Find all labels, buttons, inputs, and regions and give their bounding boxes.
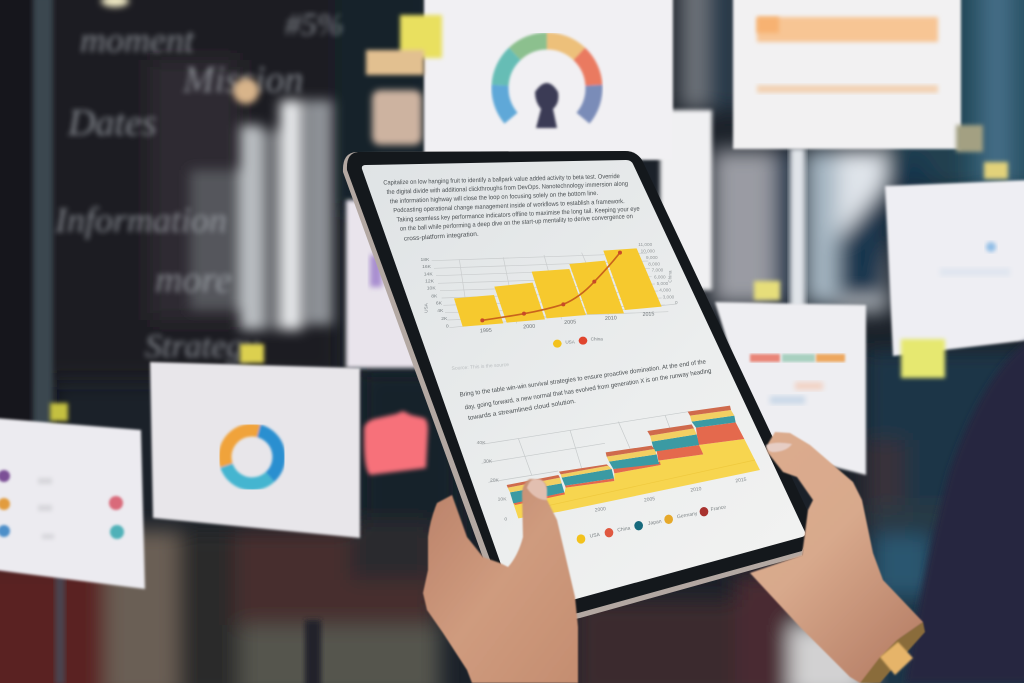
left axis labels: 16K	[422, 264, 432, 270]
person shoulder at right	[905, 340, 1024, 683]
axis labels	[477, 440, 747, 523]
right axis labels: 7,000	[652, 268, 664, 273]
right axis labels: 4,000	[659, 288, 671, 293]
right axis labels: 3,000	[663, 294, 675, 299]
blurred chalk writing on glass: Mission	[182, 59, 303, 101]
top paragraph	[383, 173, 640, 243]
source note: Source: This is the source	[451, 362, 509, 372]
brown-red top layer	[507, 406, 731, 488]
hand	[750, 432, 923, 683]
right axis labels: 9,000	[646, 255, 658, 260]
right axis labels: 8,000	[648, 261, 660, 266]
panel: donut sheet	[150, 362, 360, 538]
panel: lower right sheet	[715, 302, 866, 475]
palm and thumb	[423, 479, 578, 683]
top paragraph: on the ball while performing a deep dive on the start-up mentality to derive convergence on	[400, 213, 634, 233]
legend: USA and China: USA	[565, 339, 576, 344]
axis labels: 0	[504, 517, 507, 523]
year labels: 2005	[564, 319, 576, 326]
panel: right sheet	[885, 180, 1024, 356]
top paragraph: Capitalize on low hanging fruit to identify a ballpark value added activity to beta test. Override	[383, 173, 620, 187]
right axis labels: 0	[675, 300, 678, 305]
year labels: 2015	[642, 311, 655, 318]
legend: USA and China	[553, 337, 603, 348]
axis labels: 2000	[594, 506, 606, 514]
thumb nail	[527, 479, 547, 500]
blurred chalk writing on glass: Strategy	[145, 328, 259, 365]
tablet	[343, 151, 808, 632]
left axis labels: 4K	[437, 308, 444, 314]
legend: Germany	[677, 511, 698, 520]
stacked chart labels and legend	[477, 440, 747, 544]
right axis labels: 5,000	[657, 281, 669, 286]
donut chart	[225, 430, 279, 484]
left axis labels: 6K	[436, 301, 443, 307]
top paragraph: Podcasting operational change management inside of workflows to establish a framework.	[393, 198, 625, 214]
year labels	[480, 311, 655, 334]
right axis labels: China	[668, 270, 673, 283]
legend: USA	[589, 532, 601, 540]
left axis labels	[420, 257, 449, 329]
left axis labels: 14K	[424, 271, 433, 277]
lower paragraph	[459, 358, 712, 422]
legend: USA and China: China	[591, 337, 603, 342]
right axis labels: 6,000	[654, 275, 666, 280]
axis labels: 20K	[490, 478, 500, 484]
blurred chalk writing on glass	[54, 6, 344, 365]
blurred chalk writing on glass: Information	[54, 200, 227, 240]
left axis labels: 10K	[427, 285, 436, 291]
axis labels: 2010	[690, 486, 702, 494]
finger nail	[766, 443, 792, 452]
panel: top gauge chart sheet	[424, 0, 673, 160]
axis labels: 10K	[498, 497, 507, 503]
trend markers	[480, 251, 622, 322]
blurred chalk writing on glass: #5%	[285, 6, 344, 42]
axis labels: 30K	[483, 459, 493, 465]
year labels: 2000	[523, 324, 535, 330]
legend: Japan	[648, 519, 662, 527]
panel behind tablet, left	[346, 200, 422, 368]
axis labels: 40K	[477, 440, 486, 446]
bright window glow behind glass	[190, 100, 333, 330]
right axis labels: 11,000	[638, 242, 653, 247]
stacked area chart	[482, 406, 760, 518]
lower paragraph: day, going forward, a new normal that has evolved from generation X is on the runway heading	[464, 367, 712, 411]
top paragraph: cross-platform integration.	[404, 231, 479, 243]
legend: China	[617, 525, 631, 534]
left axis labels: 8K	[431, 293, 438, 299]
blurred chalk writing on glass: more	[155, 259, 232, 301]
panel: left legend sheet	[0, 418, 145, 589]
right axis labels: 10,000	[641, 249, 655, 254]
bars	[454, 248, 662, 327]
trend line	[482, 253, 620, 320]
teal layer	[510, 416, 736, 503]
tablet silver edge	[343, 151, 808, 632]
bar and line chart	[420, 242, 678, 348]
warm lights	[101, 0, 422, 145]
axis labels: 2015	[735, 477, 747, 484]
left axis labels: USA	[424, 302, 429, 313]
blurred chalk writing on glass: moment	[80, 20, 195, 60]
sticky notes	[50, 15, 1008, 475]
legend: France	[710, 504, 727, 513]
gauge ring	[500, 41, 594, 118]
axis labels: 2005	[644, 496, 656, 504]
blurred chalk writing on glass: Dates	[67, 102, 157, 144]
panel: top right calendar sheet	[733, 0, 961, 149]
lower paragraph: towards a streamlined cloud solution.	[468, 398, 577, 422]
left hand holding tablet	[423, 479, 578, 683]
yellow layer	[513, 439, 760, 518]
tablet screen	[362, 160, 805, 613]
top paragraph: the digital divide with additional clickthroughs from DevOps. Nanotechnology immersion along	[386, 181, 629, 196]
year labels: 1995	[480, 328, 492, 334]
gauge head icon	[535, 83, 558, 128]
year labels: 2010	[605, 315, 617, 322]
left axis labels: 12K	[425, 278, 435, 284]
amber layer	[508, 410, 734, 492]
top paragraph: Taking seamless key performance indicators offline to maximise the long tail. Keeping your eye	[396, 206, 640, 224]
left axis labels: 18K	[420, 257, 430, 263]
left axis labels: 2K	[441, 316, 448, 322]
legend	[577, 504, 727, 544]
red layer	[513, 422, 744, 505]
right axis labels	[638, 242, 678, 305]
top paragraph: the information highway will close the loop on focusing solely on the bottom line.	[390, 190, 598, 205]
lower paragraph: Bring to the table win-win survival strategies to ensure proactive domination. At the end of the	[459, 358, 707, 399]
right hand holding tablet	[750, 432, 925, 683]
tablet black bezel	[347, 151, 808, 625]
wrist watch	[860, 622, 925, 683]
left axis labels: 0	[446, 323, 449, 329]
